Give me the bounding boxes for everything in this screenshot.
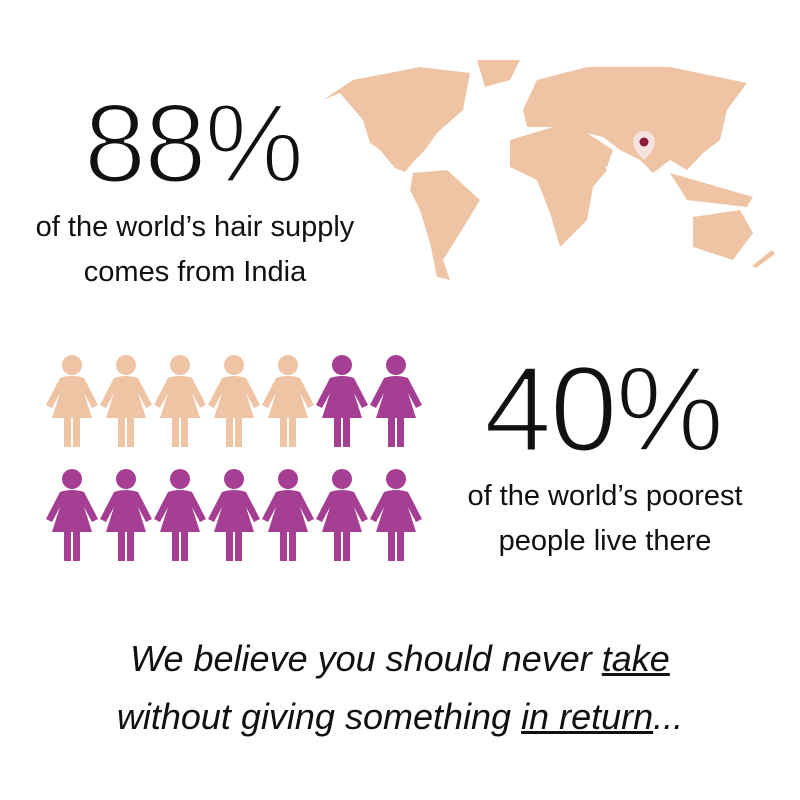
stat 40%: 40% bbox=[484, 341, 722, 477]
quote: without giving something in return... bbox=[117, 696, 683, 737]
icon: map pin bbox=[633, 131, 655, 160]
caption 40%: people live there bbox=[499, 525, 711, 557]
caption 88%: of the world’s hair supply bbox=[36, 211, 354, 243]
quote bbox=[117, 638, 683, 737]
stat 88%: 88% bbox=[84, 81, 302, 206]
caption 40% bbox=[467, 480, 743, 557]
quote: We believe you should never take bbox=[130, 638, 670, 679]
caption 88% bbox=[36, 211, 354, 288]
caption 88%: comes from India bbox=[84, 256, 306, 288]
caption 40%: of the world’s poorest bbox=[467, 480, 743, 512]
